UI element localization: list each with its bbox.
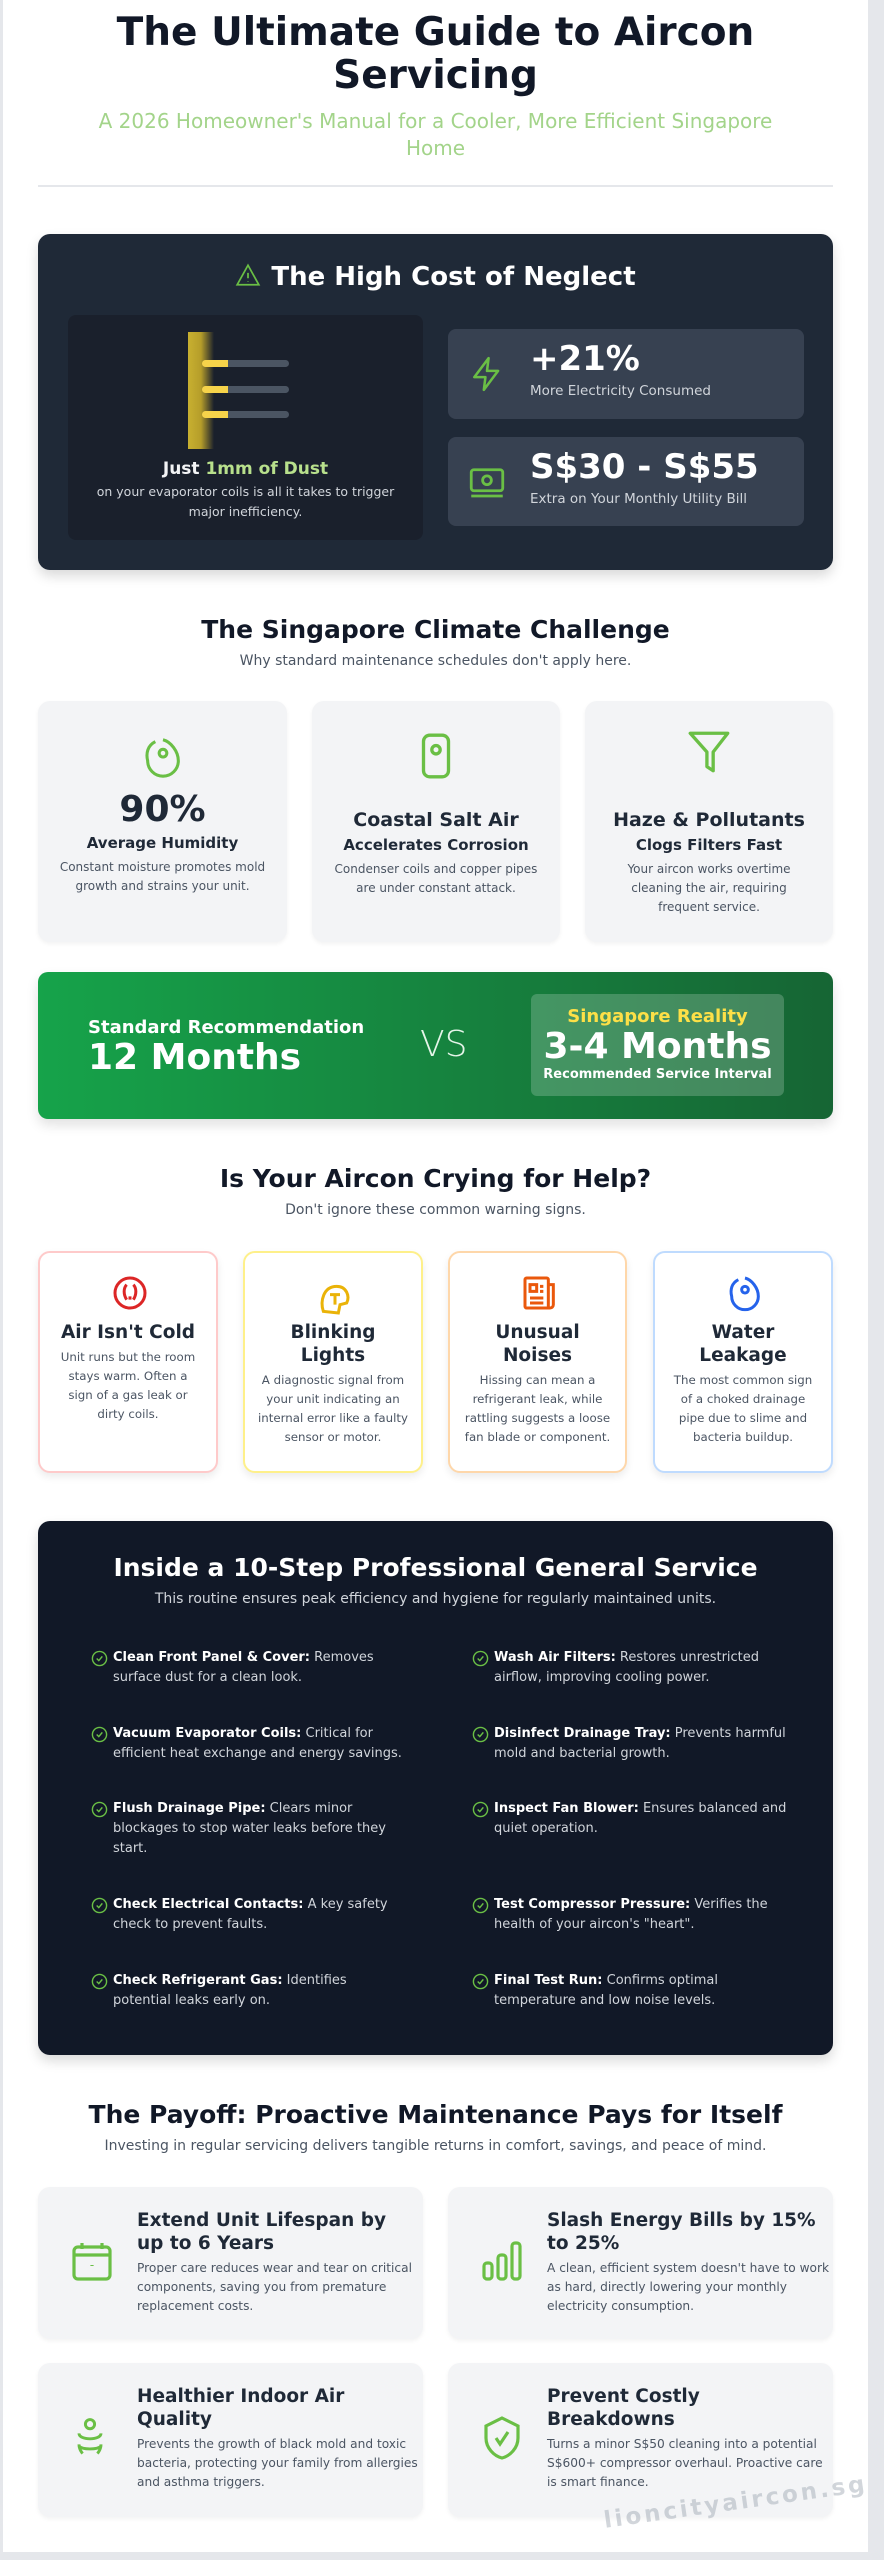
heading: high cost: The High Cost of Neglect [271,262,636,292]
panel: high cost of neglect [38,234,833,570]
subheading: climate: Why standard maintenance schedules don't apply here. [240,653,631,669]
card: unusual noises: Hissing can mean a refrigerant leak, while rattling suggests a loose fan blade or component. [465,1373,610,1444]
stat: electricity [448,329,804,419]
card: salt air: Coastal Salt Air [353,809,519,831]
card: air quality: Prevents the growth of black mold and toxic bacteria, protecting your family from allergies and asthma triggers. [137,2437,418,2489]
subheading: payoff: Investing in regular servicing delivers tangible returns in comfort, savings, and peace of mind. [104,2138,766,2154]
steps list: Inspect Fan Blower: Ensures balanced and quiet operation. [494,1801,786,1836]
steps list: Final Test Run: Confirms optimal temperature and low noise levels. [494,1973,718,2008]
singapore reality box [531,994,784,1096]
steps list: Check Electrical Contacts: A key safety check to prevent faults. [113,1897,388,1932]
heading: payoff: The Payoff: Proactive Maintenance Pays for Itself [89,2100,782,2129]
standard recommendation: 12 Months [88,1037,301,1078]
card: salt air: Condenser coils and copper pipes are under constant attack. [335,862,537,895]
stat: electricity: +21% [530,339,640,379]
card: unusual noises [448,1251,627,1473]
card: lifespan [38,2187,423,2339]
steps list: Test Compressor Pressure: Verifies the health of your aircon's "heart". [494,1897,768,1932]
vs: VS [420,1024,467,1065]
stat: bill: S$30 - S$55 [530,447,759,487]
watermark: lioncityaircon.sg [602,2471,869,2534]
card: water leakage [653,1251,833,1473]
icon: coil with dust [188,332,289,449]
card: humidity: 90% [119,789,206,830]
stat: electricity: More Electricity Consumed [530,383,711,399]
card: breakdowns: Turns a minor S$50 cleaning into a potential S$600+ compressor overhaul. Proactive care is smart finance. [547,2437,823,2489]
title: The Ultimate Guide to Aircon Servicing [117,10,754,98]
stat: bill: Extra on Your Monthly Utility Bill [530,491,747,507]
singapore reality box: Singapore Reality [567,1006,748,1027]
standard recommendation: Standard Recommendation [88,1017,364,1038]
steps list: Clean Front Panel & Cover: Removes surface dust for a clean look. [113,1650,374,1685]
heading: warning signs: Is Your Aircon Crying for Help? [220,1164,651,1193]
card: breakdowns [448,2363,833,2517]
card: haze: Your aircon works overtime cleaning the air, requiring frequent service. [627,862,791,914]
steps list: Check Refrigerant Gas: Identifies potential leaks early on. [113,1973,347,2008]
card: air quality [38,2363,423,2517]
card: humidity: Constant moisture promotes mold growth and strains your unit. [60,860,265,893]
card: salt air [312,701,560,942]
card: breakdowns: Prevent Costly Breakdowns [547,2386,700,2430]
card: energy bills [448,2187,833,2339]
card: air quality: Healthier Indoor Air Quality [137,2386,344,2430]
dust text [97,459,394,519]
card: air isn't cold: Air Isn't Cold [61,1322,195,1343]
steps list: Flush Drainage Pipe: Clears minor blockages to stop water leaks before they start. [113,1801,386,1856]
card: haze: Haze & Pollutants [613,809,805,831]
steps list: Disinfect Drainage Tray: Prevents harmful mold and bacterial growth. [494,1726,786,1761]
card: lifespan: Extend Unit Lifespan by up to 6 Years [137,2210,386,2254]
card: water leakage: Leakage [699,1345,787,1366]
standard recommendation [88,1017,364,1078]
dust illustration box [68,315,423,540]
card: blinking lights: Blinking [290,1322,376,1343]
steps list: Wash Air Filters: Restores unrestricted airflow, improving cooling power. [494,1650,759,1685]
dust text: Just 1mm of Dust [163,459,328,479]
singapore reality box: Recommended Service Interval [543,1067,772,1082]
subheading: 10-step: This routine ensures peak efficiency and hygiene for regularly maintained units. [155,1591,716,1607]
card: haze [585,701,833,942]
card: blinking lights: A diagnostic signal from your unit indicating an internal error like a faulty sensor or motor. [258,1373,408,1444]
card: energy bills: A clean, efficient system doesn't have to work as hard, directly lowering your monthly electricity consumption. [547,2261,829,2313]
card: water leakage: The most common sign of a choked drainage pipe due to slime and bacteria buildup. [674,1373,812,1444]
card: unusual noises: Unusual [495,1322,580,1343]
card: unusual noises: Noises [503,1345,572,1366]
steps list: Vacuum Evaporator Coils: Critical for efficient heat exchange and energy savings. [113,1726,402,1761]
card: lifespan: Proper care reduces wear and tear on critical components, saving you from premature replacement costs. [137,2261,412,2313]
card: salt air: Accelerates Corrosion [343,836,529,854]
card: humidity [38,701,287,942]
panel: 10-step service [38,1521,833,2055]
card: air isn't cold [38,1251,218,1473]
card: energy bills: Slash Energy Bills by 15% to 25% [547,2210,816,2254]
dust text: on your evaporator coils is all it takes to trigger major inefficiency. [97,484,394,519]
card: blinking lights [243,1251,423,1473]
banner: standard vs reality [38,972,833,1119]
steps list [92,1650,786,2008]
card: blinking lights: Lights [301,1345,365,1366]
card: air isn't cold: Unit runs but the room stays warm. Often a sign of a gas leak or dirty coils. [61,1350,195,1421]
card: humidity: Average Humidity [87,834,238,852]
subtitle: A 2026 Homeowner's Manual for a Cooler, More Efficient Singapore Home [99,109,772,160]
card: water leakage: Water [712,1322,774,1343]
card: haze: Clogs Filters Fast [636,836,782,854]
singapore reality box: 3-4 Months [543,1026,772,1067]
subheading: warning signs: Don't ignore these common warning signs. [285,1202,586,1218]
stat: bill [448,437,804,526]
heading: climate: The Singapore Climate Challenge [201,615,670,644]
heading: 10-step: Inside a 10-Step Professional General Service [113,1553,758,1582]
